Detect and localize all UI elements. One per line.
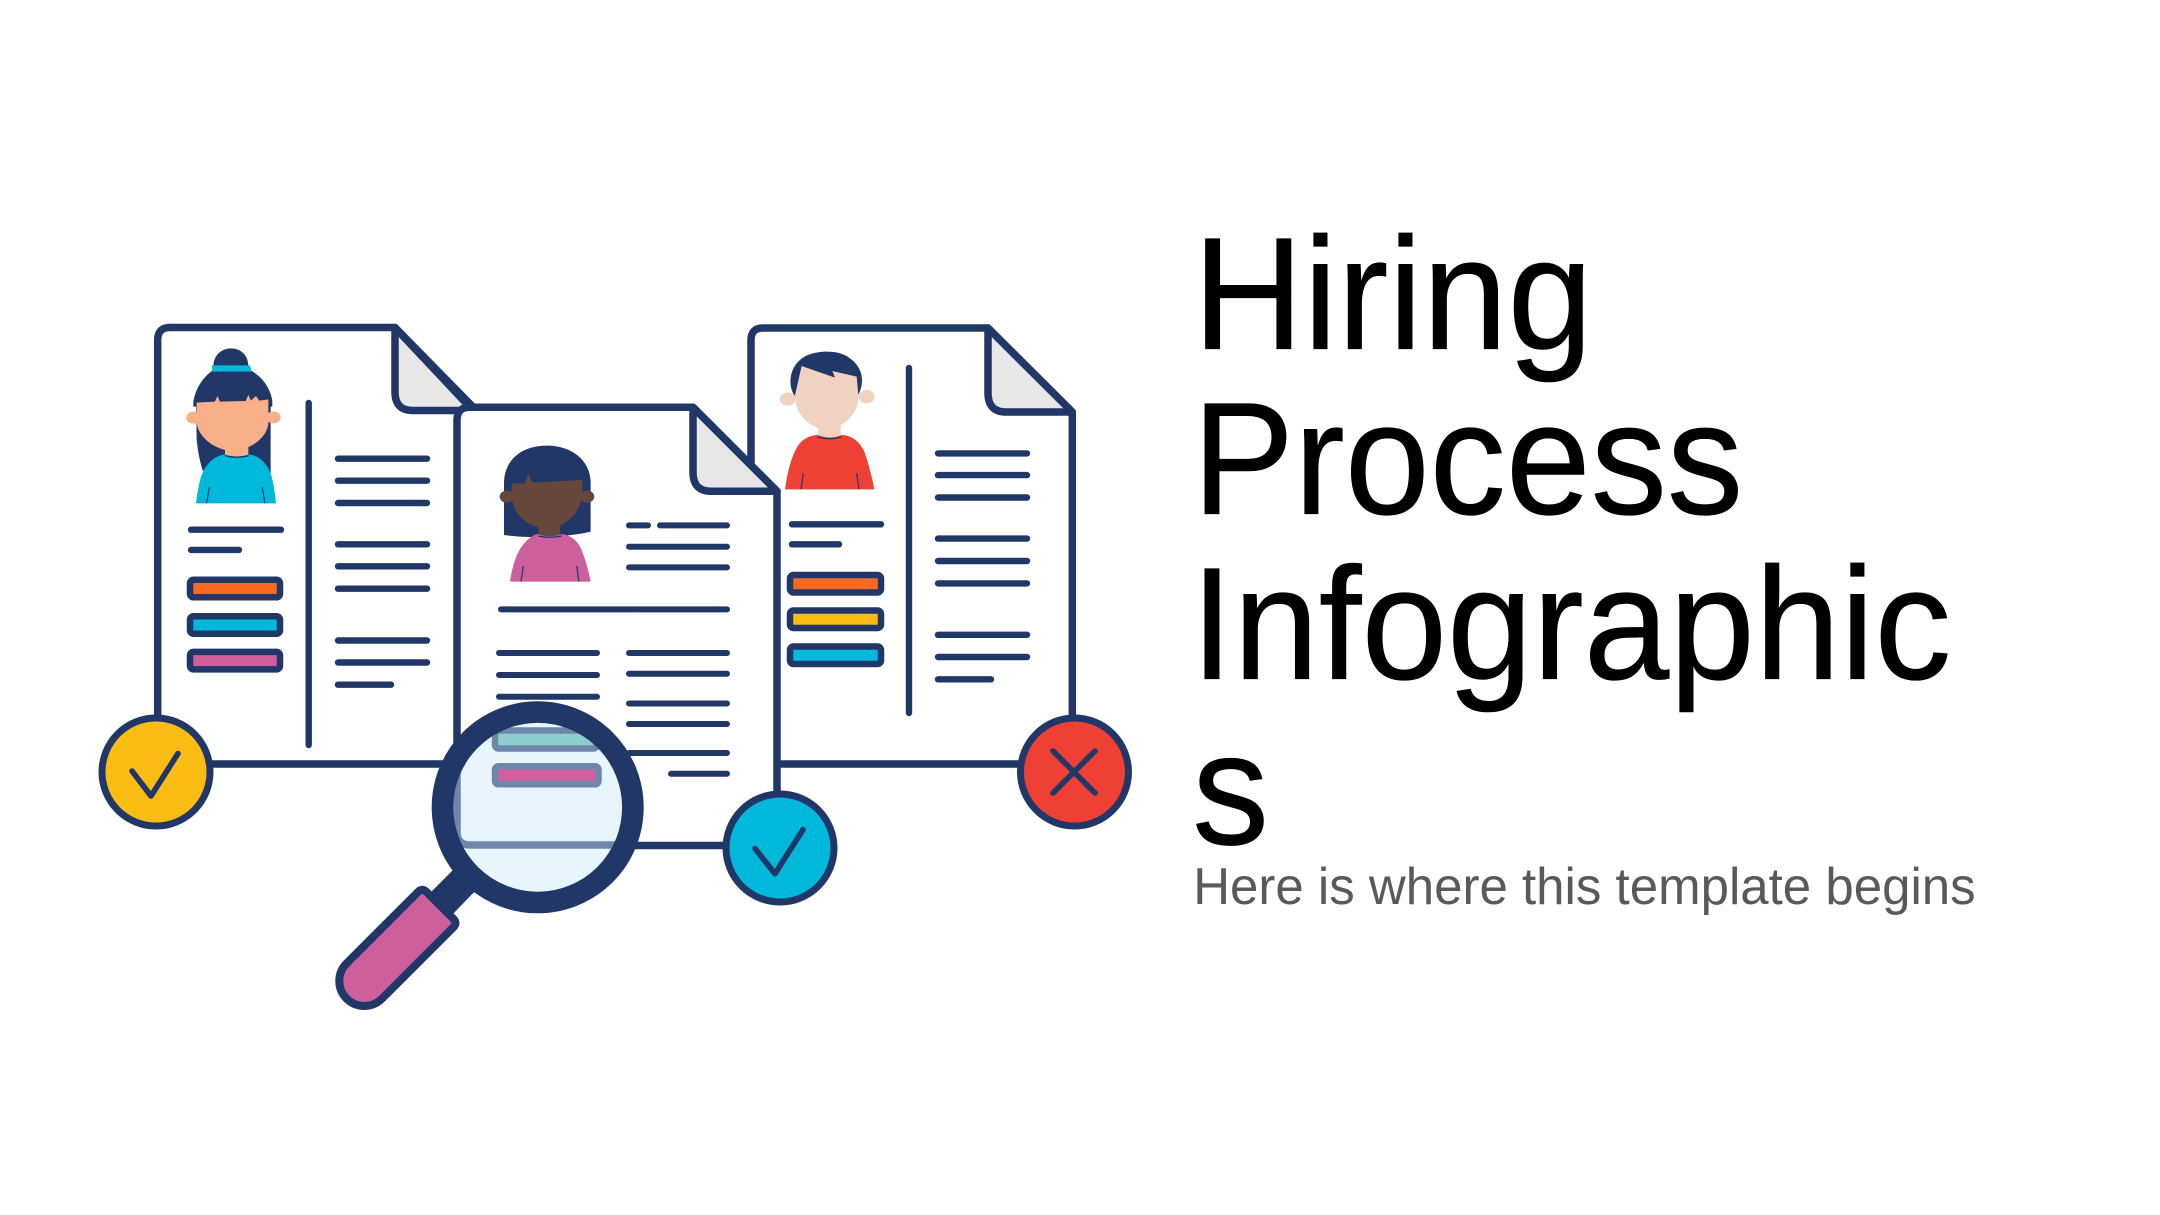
panel: resume right [751,328,1072,764]
lens ring [442,712,633,902]
avatar: man [780,352,875,489]
title: Hiring [1193,205,1593,384]
skill bars [790,575,881,664]
title: s [1192,700,1269,879]
pink handle [329,888,458,1016]
title: Infographic [1191,535,1951,713]
lens [448,717,628,897]
title: Process [1192,370,1743,549]
infographic canvas [98,232,1974,1010]
skill bars [190,580,280,669]
icon: magnifying glass [335,701,644,1010]
avatar: woman with bun [186,348,281,503]
handle connector [428,865,480,917]
icon: cyan check badge [726,794,834,902]
panel: resume left [158,328,473,764]
magnified content [453,727,615,849]
divider and text lines [191,403,427,745]
subtitle: Here is where this template begins [1193,857,1976,915]
text lines [499,525,727,774]
panel: resume centre [457,407,777,846]
icon: red cross badge [1020,718,1128,826]
title [1191,205,1951,879]
avatar: woman with bob [500,446,594,582]
icon: yellow check badge [102,718,210,826]
divider and text lines [792,368,1027,713]
